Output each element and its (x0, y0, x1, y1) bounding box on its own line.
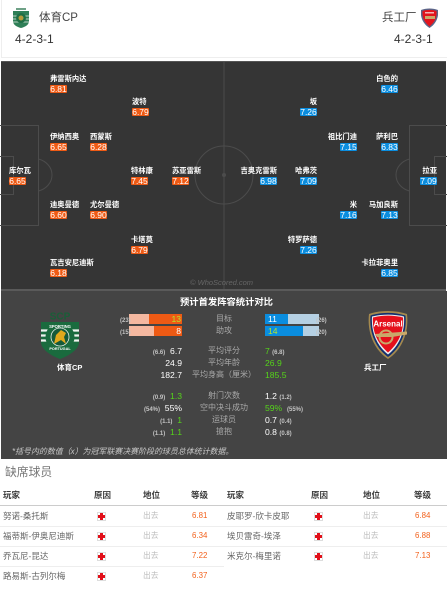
icon: injury cross (97, 532, 106, 541)
panel: pitch with lineups (1, 61, 446, 291)
position: 出去 (143, 511, 159, 520)
player: 迪奥曼德 (50, 200, 79, 220)
stat: aerials label: 空中决斗成功 (200, 403, 248, 412)
table header (0, 489, 447, 506)
player: 苏亚雷斯: 7.12 (172, 176, 189, 186)
position: 出去 (143, 571, 159, 580)
player: 米: 米 (350, 200, 357, 209)
icon: Sporting crest large: PORTUGAL (49, 347, 71, 351)
player: 拉亚 (420, 166, 437, 186)
player: 哈弗茨: 哈弗茨 (295, 166, 317, 175)
bar: home assists (129, 326, 182, 336)
player: 吉奥克雷斯 (240, 166, 277, 186)
label: assists: 助攻 (216, 326, 232, 335)
player: 马加良斯: 7.13 (381, 210, 398, 220)
stat: average rating away: 7 (6.8) (265, 346, 285, 356)
bar fill (265, 326, 303, 336)
player: 伊纳西奥: 伊纳西奥 (50, 132, 79, 141)
player: 瓦吉安尼迪斯: 瓦吉安尼迪斯 (50, 258, 94, 267)
player: 吉奥克雷斯: 吉奥克雷斯 (241, 166, 277, 175)
stat: dribbles home: (1.1) 1 (160, 415, 182, 425)
player: 祖比门迪: 祖比门迪 (328, 132, 357, 141)
player: 祖比门迪 (328, 132, 357, 152)
stat: tackles home: (1.1) 1.1 (153, 427, 182, 437)
stat: average height away: 185.5 (265, 370, 287, 380)
player: 伊纳西奥 (50, 132, 79, 152)
bar: away assists (265, 326, 319, 336)
player: 弗雷斯内达: 弗雷斯内达 (50, 74, 86, 83)
name: 埃贝雷奇-埃泽 (227, 531, 281, 541)
label: goals: 目标 (216, 314, 232, 323)
player: 弗雷斯内达 (50, 74, 86, 94)
pitch markings (0, 62, 447, 289)
player: 卡塔莫 (131, 235, 153, 255)
player: 尤尔曼德: 尤尔曼德 (90, 200, 119, 209)
player: 特林康: 7.45 (131, 176, 148, 186)
player: 弗雷斯内达: 6.81 (50, 84, 67, 94)
heading: home team name: 体育CP (39, 12, 78, 24)
rating: 7.22 (192, 551, 207, 560)
bar fill (149, 314, 182, 324)
player: 萨利巴 (376, 132, 398, 152)
player: 西蒙斯: 西蒙斯 (90, 132, 112, 141)
name: 皮耶罗-欣卡皮耶 (227, 511, 289, 521)
icon: injury cross (314, 512, 323, 521)
stat: shots home: (0.9) 1.3 (153, 391, 182, 401)
player: 卡拉菲奥里: 6.85 (381, 268, 398, 278)
player: 卡拉菲奥里: 卡拉菲奥里 (362, 258, 398, 267)
heading: missing players: 缺席球员 (5, 465, 52, 479)
text: away formation: 4-2-3-1 (394, 32, 433, 46)
player: 波特: 波特 (132, 97, 147, 106)
player: 卡塔莫: 6.79 (131, 245, 148, 255)
player: 瓦吉安尼迪斯: 6.18 (50, 268, 67, 278)
stat: dribbles label: 运球员 (212, 415, 236, 424)
player: 坂: 7.26 (300, 107, 317, 117)
player: 波特: 6.79 (132, 107, 149, 117)
player: 马加良斯: 马加良斯 (369, 200, 398, 209)
rating: 7.13 (415, 551, 430, 560)
stat: tackles label: 搶抱 (216, 427, 232, 436)
player: 祖比门迪: 7.15 (340, 142, 357, 152)
player: 米: 7.16 (340, 210, 357, 220)
rating: 6.81 (192, 511, 207, 520)
stat: aerials home: (54%) 55% (144, 403, 182, 413)
player: 苏亚雷斯 (172, 166, 201, 186)
player: 吉奥克雷斯: 6.98 (260, 176, 277, 186)
panel: missing players (0, 459, 447, 590)
player: 迪奥曼德: 迪奥曼德 (50, 200, 79, 209)
player: 库尔瓦: 6.65 (9, 176, 26, 186)
icon: injury cross (97, 512, 106, 521)
panel: match header (1, 0, 447, 58)
player: 西蒙斯: 6.28 (90, 142, 107, 152)
position: 出去 (143, 551, 159, 560)
column: player left: 玩家 (3, 490, 20, 500)
icon: Arsenal crest large: Arsenal (373, 320, 403, 328)
position: 出去 (363, 551, 379, 560)
player: 库尔瓦: 库尔瓦 (9, 166, 31, 175)
player: 马加良斯 (369, 200, 398, 220)
name: 乔瓦尼-昆达 (3, 551, 48, 561)
text: away assists bracket: (20) (316, 330, 327, 336)
rating: 6.34 (192, 531, 207, 540)
value: 11 (268, 314, 277, 324)
player: 苏亚雷斯: 苏亚雷斯 (172, 166, 201, 175)
player: 坂 (300, 97, 317, 117)
text: home assists bracket: (15) (120, 330, 131, 336)
stat: average age home: 24.9 (165, 358, 182, 368)
player: 白色的: 白色的 (376, 74, 398, 83)
bar: away goals (265, 314, 319, 324)
icon: Sporting crest large: SCP (50, 312, 71, 322)
row: 埃贝雷奇-埃泽 (224, 527, 447, 547)
player: 萨利巴: 6.83 (381, 142, 398, 152)
name: 米克尔-梅里诺 (227, 551, 281, 561)
player: 卡拉菲奥里 (362, 258, 398, 278)
row: 米克尔-梅里诺 (227, 551, 430, 561)
heading: away team name: 兵工厂 (382, 12, 416, 24)
player: 哈弗茨: 7.09 (300, 176, 317, 186)
text: away goals bracket: (26) (316, 318, 327, 324)
player: 西蒙斯 (90, 132, 112, 152)
player: 米 (340, 200, 357, 220)
stat: average height label: 平均身高（厘米） (192, 370, 256, 379)
stat: average rating label: 平均评分 (208, 346, 240, 355)
player: 白色的 (376, 74, 398, 94)
player: 拉亚: 7.09 (420, 176, 437, 186)
icon: injury cross (314, 552, 323, 561)
icon: injury cross (314, 532, 323, 541)
column: position left: 地位 (143, 490, 160, 500)
icon: Sporting crest large: SPORTING (49, 324, 71, 329)
position: 出去 (363, 531, 379, 540)
text: away team label: 兵工厂 (364, 363, 386, 372)
icon: Arsenal crest large (368, 311, 408, 359)
column: position right: 地位 (363, 490, 380, 500)
rating: 6.84 (415, 511, 430, 520)
player: 拉亚: 拉亚 (422, 166, 437, 175)
player: 萨利巴: 萨利巴 (376, 132, 398, 141)
rating: 6.88 (415, 531, 430, 540)
rating: 6.37 (192, 571, 207, 580)
player: 瓦吉安尼迪斯 (50, 258, 94, 278)
column: rating right: 等级 (414, 490, 431, 500)
player: 特罗萨德: 7.26 (300, 245, 317, 255)
watermark: © WhoScored.com (190, 278, 253, 287)
stat: dribbles away: 0.7 (0.4) (265, 415, 292, 425)
player: 特林康: 特林康 (131, 166, 153, 175)
row: 努诺-桑托斯 (0, 507, 224, 527)
value: 13 (171, 314, 181, 324)
bar fill (154, 326, 182, 336)
stat: shots away: 1.2 (1.2) (265, 391, 292, 401)
name: 路易斯-古列尔梅 (3, 571, 65, 581)
column: player right: 玩家 (227, 490, 244, 500)
row: 路易斯-古列尔梅 (3, 571, 207, 581)
bar fill (265, 314, 288, 324)
text: home goals bracket: (23) (120, 318, 131, 324)
stat: tackles away: 0.8 (0.8) (265, 427, 292, 437)
column: rating left: 等级 (191, 490, 208, 500)
text: home formation: 4-2-3-1 (15, 32, 54, 46)
position: 出去 (363, 511, 379, 520)
column: reason left: 原因 (94, 490, 111, 500)
player: 特罗萨德 (288, 235, 317, 255)
player: 迪奥曼德: 6.60 (50, 210, 67, 220)
player: 特罗萨德: 特罗萨德 (288, 235, 317, 244)
icon: injury cross (97, 552, 106, 561)
stat: average height home: 182.7 (160, 370, 182, 380)
player: 伊纳西奥: 6.65 (50, 142, 67, 152)
row: 福蒂斯-伊奥尼迪斯 (0, 527, 224, 547)
player: 哈弗茨 (295, 166, 317, 186)
value: 14 (268, 326, 278, 336)
footnote: *括号内的数值（x）为冠军联赛决赛阶段的球员总体统计数据。 (12, 447, 233, 456)
heading: comparison title: 预计首发阵容统计对比 (180, 297, 273, 307)
icon: Sporting crest large (41, 312, 79, 359)
stat: average age label: 平均年龄 (208, 358, 240, 367)
stat: average age away: 26.9 (265, 358, 282, 368)
player: 波特 (132, 97, 149, 117)
icon: Sporting crest small (13, 8, 29, 28)
panel: lineup stats comparison (1, 291, 447, 459)
bar: home goals (129, 314, 182, 324)
value: 8 (176, 326, 181, 336)
player: 尤尔曼德 (90, 200, 119, 220)
name: 福蒂斯-伊奥尼迪斯 (3, 531, 74, 541)
icon: Arsenal crest small (421, 8, 438, 28)
player: 库尔瓦 (9, 166, 31, 186)
icon: injury cross (97, 572, 106, 581)
player: 白色的: 6.46 (381, 84, 398, 94)
player: 特林康 (131, 166, 153, 186)
position: 出去 (143, 531, 159, 540)
stat: average rating home: (6.6) 6.7 (153, 346, 182, 356)
stat: shots label: 射门次数 (208, 391, 240, 400)
row: 皮耶罗-欣卡皮耶 (224, 507, 447, 527)
name: 努诺-桑托斯 (3, 511, 48, 521)
player: 尤尔曼德: 6.90 (90, 210, 107, 220)
player: 卡塔莫: 卡塔莫 (131, 235, 153, 244)
row: 乔瓦尼-昆达 (0, 547, 224, 567)
column: reason right: 原因 (311, 490, 328, 500)
text: home team label: 体育CP (57, 363, 82, 372)
player: 坂: 坂 (310, 97, 317, 106)
stat: aerials away: 59% (55%) (265, 403, 303, 413)
